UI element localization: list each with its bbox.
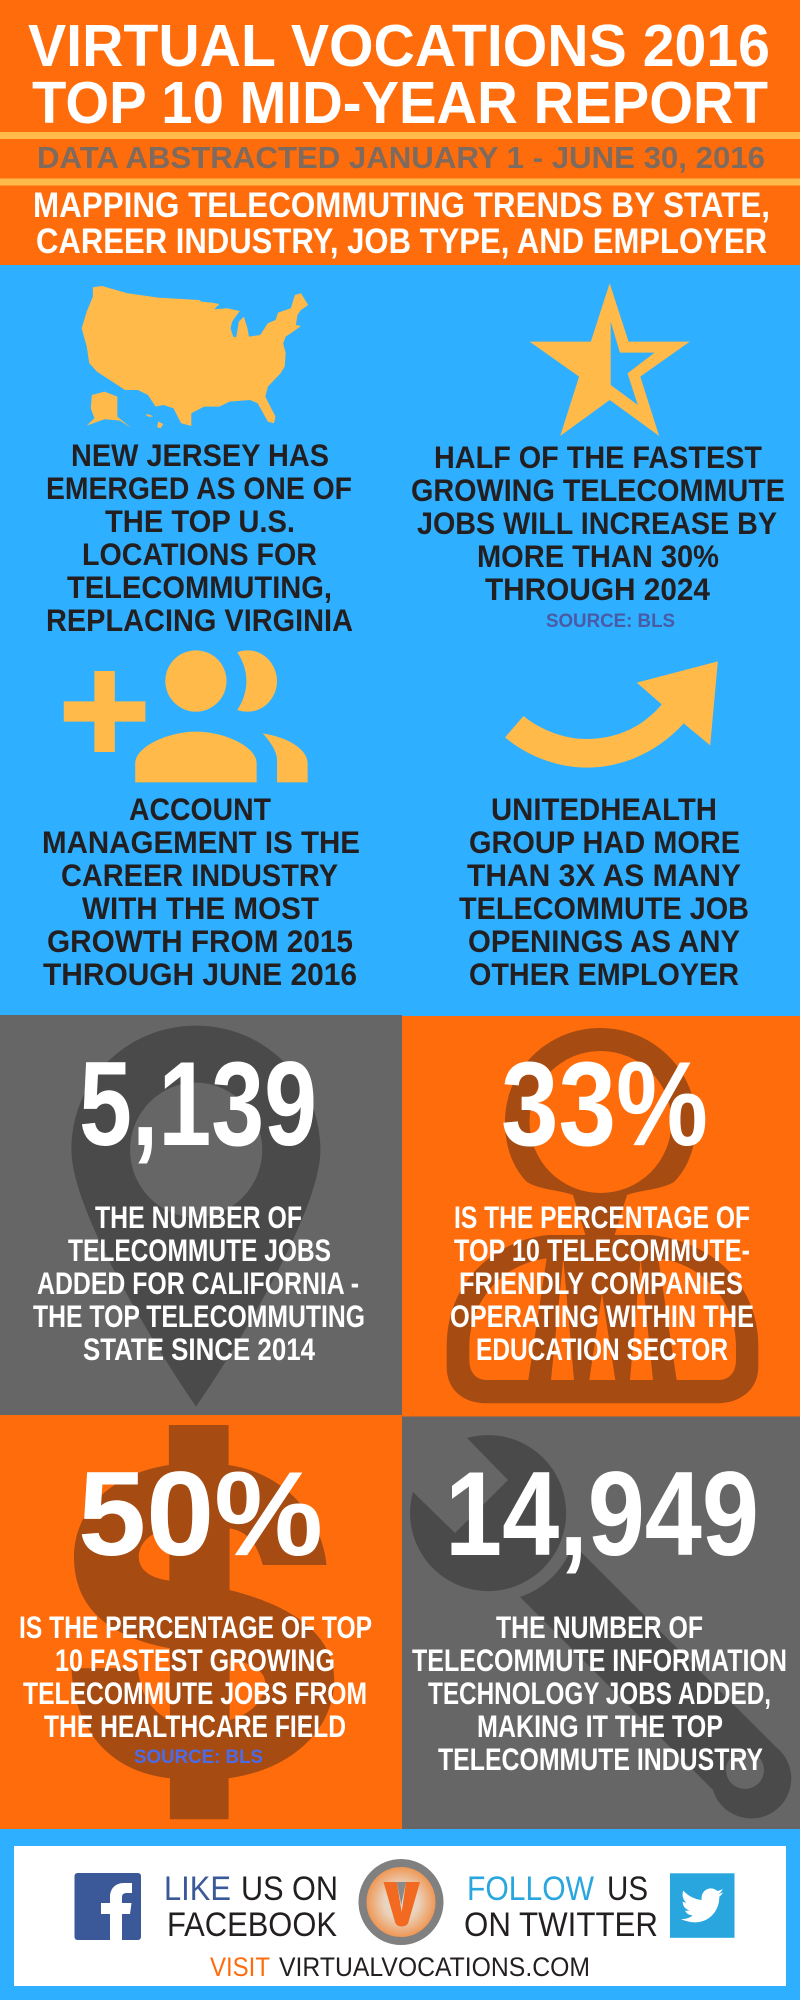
panel: education stat [402, 1016, 800, 1416]
text: California: STATE SINCE 2014 [83, 1331, 315, 1367]
text: California: ADDED FOR CALIFORNIA - [37, 1265, 359, 1301]
date range: DATA ABSTRACTED JANUARY 1 - JUNE 30, 2016 [37, 140, 765, 175]
text: UnitedHealth Group: GROUP HAD MORE [469, 824, 740, 860]
text: healthcare: IS THE PERCENTAGE OF TOP [19, 1609, 372, 1645]
text: education: FRIENDLY COMPANIES [459, 1265, 743, 1301]
text: information technology: THE NUMBER OF [496, 1609, 703, 1645]
text: fastest growing jobs: MORE THAN 30% [477, 538, 719, 574]
text: New Jersey: EMERGED AS ONE OF [46, 470, 352, 506]
text: New Jersey: THE TOP U.S. [105, 503, 295, 539]
number: 50%: 50% [78, 1447, 323, 1581]
title: VIRTUAL VOCATIONS 2016 [28, 13, 770, 79]
text: like us on Facebook [164, 1870, 338, 1944]
text: fastest growing jobs: SOURCE: BLS [546, 610, 675, 632]
icon: growth arrow [505, 661, 718, 768]
text: New Jersey [46, 437, 353, 638]
icon: dollar sign [71, 1425, 334, 1819]
text: follow us on Twitter [464, 1870, 658, 1944]
text: California: TELECOMMUTE JOBS [68, 1232, 331, 1268]
text: healthcare: TELECOMMUTE JOBS FROM [23, 1675, 367, 1711]
icon: person [447, 1028, 758, 1403]
text: like us on Facebook: FACEBOOK [167, 1906, 337, 1944]
text: UnitedHealth Group: TELECOMMUTE JOB [459, 890, 749, 926]
text: account management: MANAGEMENT IS THE [42, 824, 360, 860]
icon: USA map [82, 286, 308, 428]
icon: wrench [410, 1435, 791, 1818]
text: education [450, 1199, 754, 1367]
text: New Jersey: REPLACING VIRGINIA [46, 602, 353, 638]
text: account management: GROWTH FROM 2015 [47, 923, 353, 959]
text: UnitedHealth Group: OTHER EMPLOYER [469, 956, 739, 992]
text: information technology [412, 1609, 787, 1777]
text: follow us on Twitter: FOLLOW [467, 1870, 594, 1908]
panel: healthcare stat [0, 1415, 402, 1829]
icon: map pin [71, 1026, 320, 1407]
text: New Jersey: NEW JERSEY HAS [71, 437, 329, 473]
text: healthcare: SOURCE: BLS [134, 1746, 263, 1768]
text: follow us on Twitter: US [607, 1870, 648, 1908]
panel: header [0, 0, 800, 265]
text: healthcare: 10 FASTEST GROWING [55, 1642, 335, 1678]
panel: information technology stat [402, 1416, 800, 1829]
icon: Virtual Vocations logo [362, 1863, 440, 1941]
text: like us on Facebook: US ON [241, 1870, 338, 1908]
icon: star [530, 283, 690, 436]
text: follow us on Twitter: ON TWITTER [464, 1906, 658, 1944]
text: visit website: VISIT [210, 1952, 270, 1982]
text: California [33, 1199, 365, 1367]
text: California: THE TOP TELECOMMUTING [33, 1298, 365, 1334]
text: account management: WITH THE MOST [82, 890, 319, 926]
panel: California stat [0, 1015, 402, 1415]
title: TOP 10 MID-YEAR REPORT [32, 70, 768, 136]
icon: Facebook [74, 1873, 141, 1940]
number: 5,139: 5,139 [79, 1037, 317, 1171]
text: UnitedHealth Group [459, 791, 749, 992]
text: account management [42, 791, 360, 992]
text: account management: THROUGH JUNE 2016 [43, 956, 357, 992]
text: information technology: MAKING IT THE TOP [477, 1708, 723, 1744]
text: education: EDUCATION SECTOR [476, 1331, 728, 1367]
subtitle [33, 186, 770, 261]
icon: Twitter [670, 1873, 734, 1938]
text: visit website: VIRTUALVOCATIONS.COM [279, 1952, 590, 1982]
text: healthcare [19, 1609, 372, 1768]
text: UnitedHealth Group: OPENINGS AS ANY [468, 923, 740, 959]
text: UnitedHealth Group: UNITEDHEALTH [491, 791, 717, 827]
text: fastest growing jobs: HALF OF THE FASTEST [434, 439, 762, 475]
number: 33%: 33% [501, 1037, 708, 1171]
panel: footer [0, 1829, 800, 2000]
text: like us on Facebook: LIKE [164, 1870, 231, 1908]
text: fastest growing jobs: THROUGH 2024 [485, 571, 710, 607]
title [28, 13, 770, 136]
text: UnitedHealth Group: THAN 3X AS MANY [467, 857, 741, 893]
text: fastest growing jobs [411, 439, 785, 632]
text: account management: ACCOUNT [129, 791, 271, 827]
text: New Jersey: TELECOMMUTING, [67, 569, 332, 605]
icon: add user group [64, 650, 308, 782]
text: New Jersey: LOCATIONS FOR [82, 536, 317, 572]
text: healthcare: THE HEALTHCARE FIELD [44, 1708, 346, 1744]
text: account management: CAREER INDUSTRY [61, 857, 338, 893]
panel: key findings [0, 265, 800, 1015]
text: California: THE NUMBER OF [95, 1199, 302, 1235]
